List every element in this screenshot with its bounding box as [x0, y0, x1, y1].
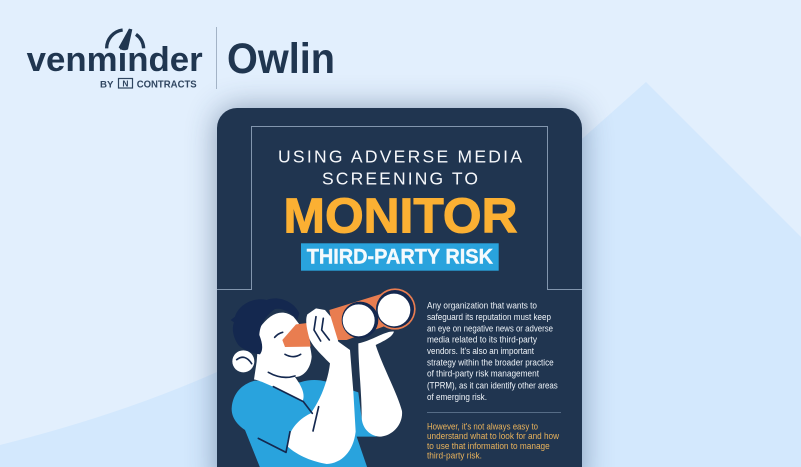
far arm: [358, 332, 402, 437]
logo: venminder by contracts: [27, 29, 203, 90]
text block: introduction: [427, 301, 558, 402]
logo: owlin: Owlin: [227, 35, 335, 83]
panel: infographic card: [217, 108, 582, 467]
text block: introduction: strategy within the broader practice: [427, 357, 554, 367]
hair: [231, 298, 299, 354]
binoculars: [329, 288, 416, 340]
text block: introduction: safeguard its reputation must keep: [427, 312, 551, 322]
shirt: [232, 380, 377, 467]
text block: orange callout: [427, 421, 559, 461]
text block: orange callout: to use that information to manage: [427, 441, 550, 451]
icon: gauge: [107, 29, 144, 50]
title: [278, 147, 522, 271]
ear: [232, 350, 254, 372]
byline: by contracts: N: [122, 79, 129, 89]
byline: by contracts: CONTRACTS: [137, 79, 197, 90]
text block: introduction: media related to its third-party: [427, 335, 537, 345]
text block: introduction: of third-party risk management: [427, 369, 539, 379]
heading: using adverse media screening to: USING ADVERSE MEDIA: [278, 147, 522, 167]
face and arm lines: [258, 317, 329, 452]
nose piece: [282, 323, 311, 347]
heading: using adverse media screening to: [278, 147, 522, 189]
heading: monitor: MONITOR: [284, 190, 518, 244]
text block: introduction: an eye on negative news or adverse: [427, 323, 553, 333]
neck and face: [254, 313, 312, 401]
badge: third-party risk: THIRD-PARTY RISK: [307, 245, 493, 268]
text block: introduction: vendors. It's also an important: [427, 346, 534, 356]
text block: introduction: (TPRM), as it can identify other areas: [427, 381, 558, 391]
byline: by contracts: [100, 78, 197, 90]
illustration: person with binoculars: [231, 288, 416, 467]
text block: orange callout: understand what to look for and how: [427, 431, 559, 441]
wordmark: venminder: venminder: [27, 41, 203, 79]
heading: using adverse media screening to: SCREENING TO: [322, 169, 478, 189]
near arm and hand: [287, 308, 356, 464]
text block: orange callout: However, it's not always easy to: [427, 421, 538, 431]
text block: introduction: of emerging risk.: [427, 392, 487, 402]
text block: introduction: Any organization that wants to: [427, 301, 537, 311]
byline: by contracts: BY: [100, 79, 114, 90]
text block: orange callout: third-party risk.: [427, 451, 482, 461]
